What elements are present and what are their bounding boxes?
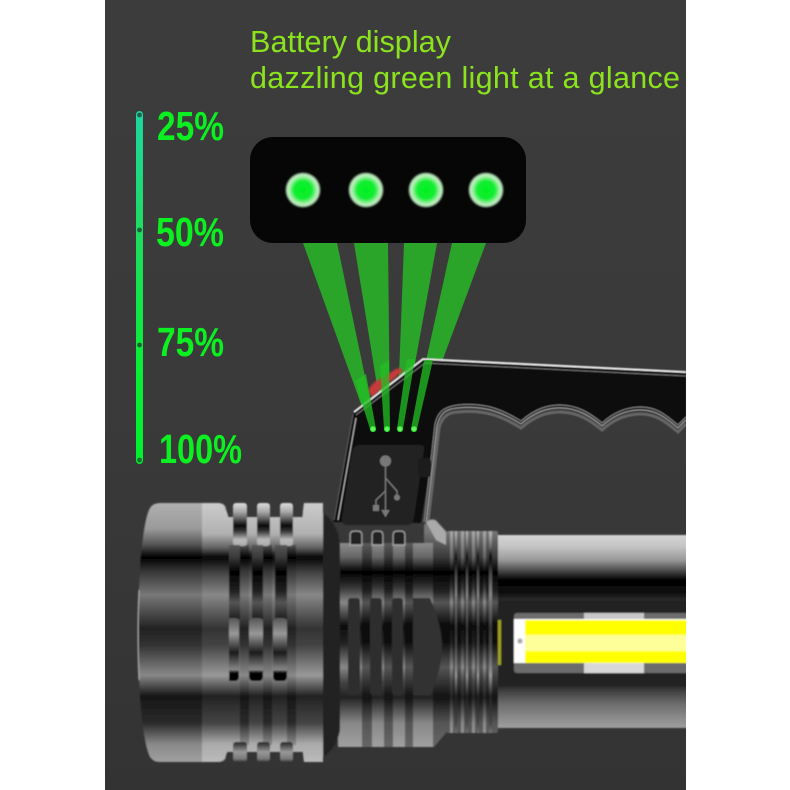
enlarged LED indicator panel (250, 137, 526, 243)
title (250, 25, 680, 95)
COB side light (498, 613, 694, 673)
battery level scale bar (136, 111, 143, 464)
beam overlay on handle (355, 359, 433, 429)
battery percentage labels: 50% (156, 209, 224, 255)
title: Battery display (250, 25, 452, 59)
battery percentage labels (156, 103, 242, 472)
handle (333, 359, 686, 525)
mid section (338, 531, 442, 747)
title: dazzling green light at a glance (250, 61, 680, 95)
battery percentage labels: 75% (157, 319, 224, 365)
red button (368, 368, 403, 397)
battery percentage labels: 25% (157, 103, 224, 149)
small indicator LEDs (370, 426, 417, 432)
flashlight (138, 359, 694, 762)
collar ring and dome (300, 503, 340, 762)
tube body (495, 535, 690, 728)
USB panel (342, 445, 424, 525)
dark panel (105, 0, 686, 790)
lens head (138, 503, 229, 762)
side tab (420, 458, 432, 478)
threaded ring (446, 531, 498, 733)
light beams from indicators to enlarged view (303, 243, 486, 429)
indicator window (362, 418, 428, 440)
cone ring (424, 519, 446, 747)
icon: USB symbol (373, 455, 400, 516)
head ribbed section (222, 503, 304, 762)
battery percentage labels: 100% (159, 426, 242, 472)
